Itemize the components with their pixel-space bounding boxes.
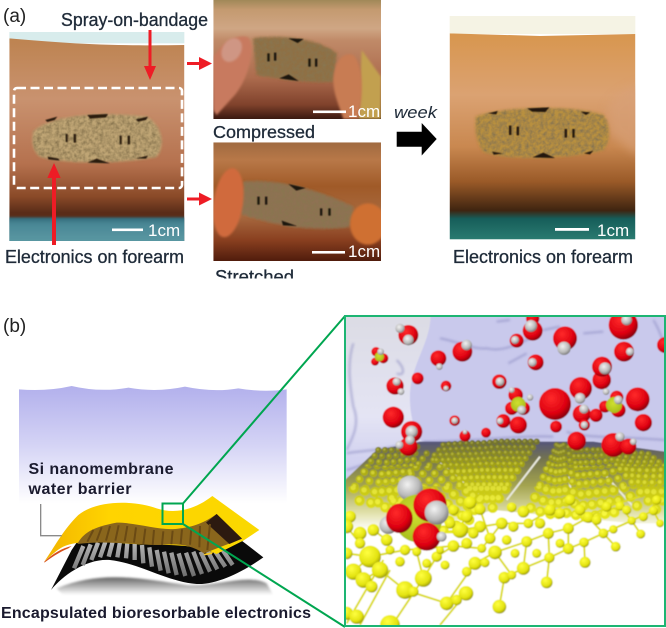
scale bar: forearm photo xyxy=(112,221,180,240)
label: stretched: Stretched xyxy=(215,267,294,287)
silicon atoms xyxy=(340,495,664,628)
scale bar: after one week xyxy=(555,221,629,240)
finger right xyxy=(350,203,386,245)
arrow: to stretched xyxy=(187,192,212,206)
yellow encapsulation film xyxy=(44,496,259,562)
background: water xyxy=(346,510,664,625)
photo: after one week xyxy=(450,16,640,239)
acid molecule: right xyxy=(599,388,626,417)
label: spray-on-bandage: Spray-on-bandage xyxy=(61,9,208,30)
arrow: to compressed xyxy=(187,57,212,70)
acid molecule: upper left xyxy=(371,347,388,366)
arrow: down to bandage xyxy=(144,30,156,80)
water molecules: oxygen xyxy=(383,310,666,457)
brown layer seen through film xyxy=(77,514,242,553)
silicon lattice rows xyxy=(348,442,665,543)
device shadow xyxy=(57,577,273,595)
label: Si nanomembrane water barrier: water barrier xyxy=(28,481,132,498)
label: Si nanomembrane water barrier: Si nanomembrane xyxy=(28,461,174,478)
arrow: up to electronics xyxy=(47,163,61,245)
label: compressed: Compressed xyxy=(213,122,315,142)
finger left xyxy=(213,36,252,115)
scale bar: after one week: 1cm xyxy=(597,221,629,240)
lattice gaps xyxy=(440,457,633,507)
photo: stretched xyxy=(209,142,386,261)
zoom indicator box and lines xyxy=(162,316,345,627)
device illustration xyxy=(41,496,273,595)
scale bar: stretched: 1cm xyxy=(348,242,380,261)
lattice under-tone xyxy=(346,440,664,528)
water molecules: hydrogen xyxy=(393,315,637,449)
scale bar: forearm photo: 1cm xyxy=(148,221,180,240)
lattice atom highlights xyxy=(348,441,664,543)
electrode stripes xyxy=(74,542,233,576)
molecular simulation panel xyxy=(340,310,666,628)
scale bar: compressed xyxy=(313,102,380,121)
black substrate xyxy=(51,539,263,590)
panel border xyxy=(345,316,665,626)
photo: compressed xyxy=(213,0,381,119)
bandage patch xyxy=(32,115,162,162)
label: electronics on forearm: Electronics on forearm xyxy=(5,247,184,267)
label: Si nanomembrane water barrier xyxy=(28,461,174,498)
panel label (b): (b) xyxy=(3,316,26,337)
water body xyxy=(19,386,287,503)
label: week: week xyxy=(394,103,439,122)
scale bar: compressed: 1cm xyxy=(348,102,380,121)
silicon bonds xyxy=(347,497,660,625)
acid molecule: large foreground xyxy=(379,476,449,551)
arrow: black time arrow xyxy=(397,123,437,156)
photo: bandage on forearm xyxy=(7,32,188,244)
finger right xyxy=(333,54,362,119)
scale bar: stretched xyxy=(312,242,380,261)
label: electronics on forearm (right): Electronics on forearm xyxy=(453,247,633,267)
dashed selection box xyxy=(14,88,182,188)
label: encapsulated bioresorbable electronics: Encapsulated bioresorbable electronics xyxy=(1,605,311,622)
panel label (a): (a) xyxy=(3,6,26,27)
finger left xyxy=(213,168,245,238)
callout line xyxy=(41,504,62,536)
acid molecule: centre xyxy=(505,387,533,415)
